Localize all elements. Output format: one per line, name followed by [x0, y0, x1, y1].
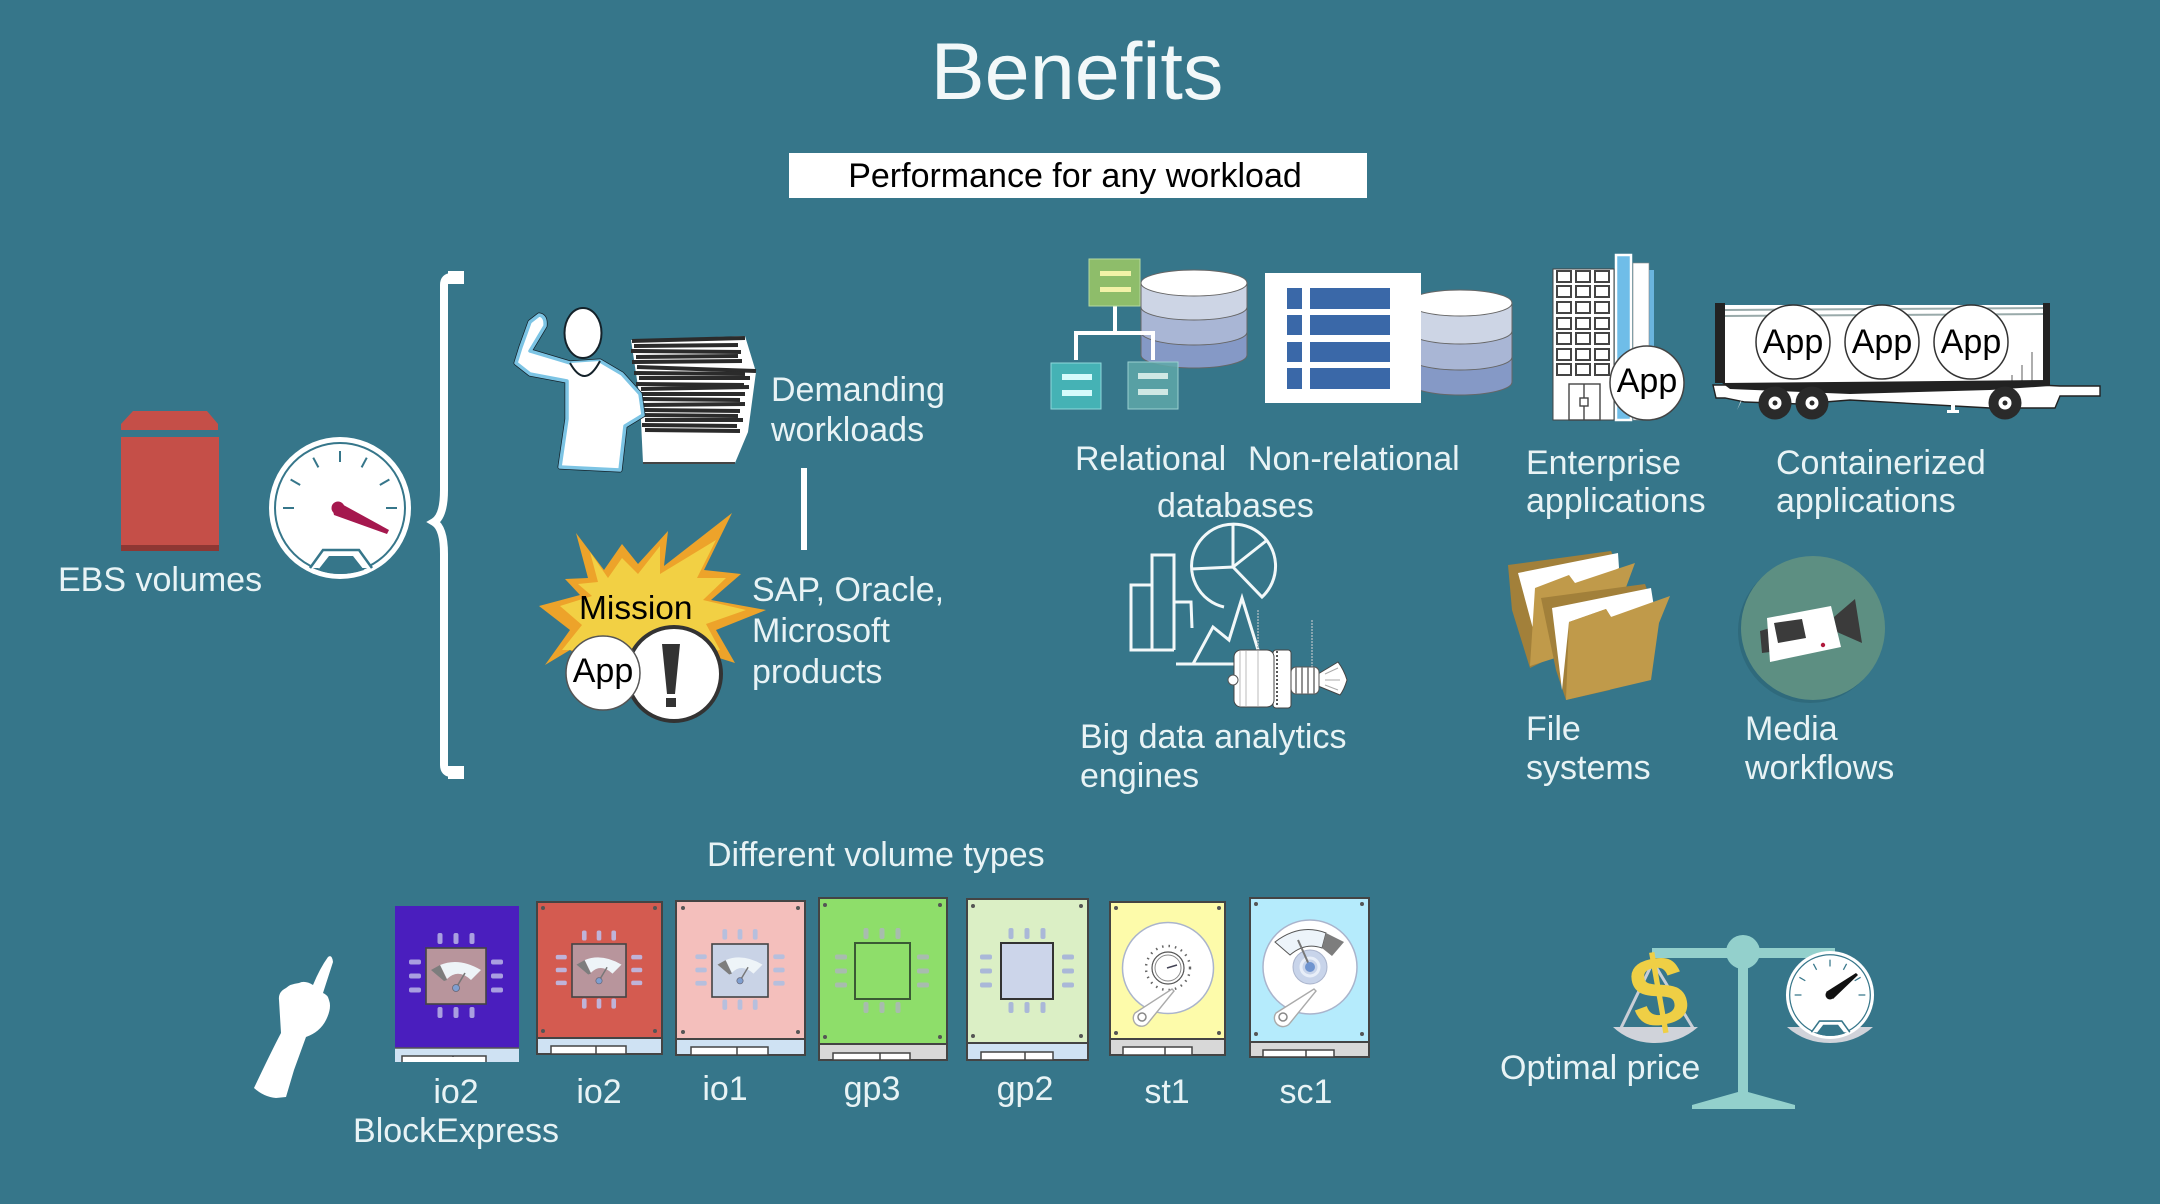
- title: Benefits: [931, 27, 1223, 117]
- label: Relational: Relational: [1075, 440, 1226, 478]
- app badges: App: [1763, 323, 1823, 361]
- labels: volume types: st1: [1144, 1073, 1190, 1111]
- label: Containerized applications: Containerized: [1776, 444, 1986, 482]
- icon: enterprise building with app: [1553, 255, 1684, 420]
- text: Mission: Mission: [579, 590, 693, 627]
- label: SAP, Oracle, Microsoft products: products: [752, 653, 882, 691]
- volume: gp3: [819, 898, 947, 1060]
- label: Media workflows: workflows: [1744, 749, 1894, 787]
- table node teal: [1051, 363, 1101, 409]
- icon: satellite engine: [1228, 610, 1347, 708]
- label: Big data analytics engines: engines: [1080, 757, 1199, 795]
- divider between workloads: [801, 468, 807, 550]
- labels: volume types: gp3: [844, 1070, 900, 1108]
- label: File systems: File: [1526, 710, 1581, 748]
- app badge: App: [573, 652, 633, 690]
- label: Enterprise applications: Enterprise: [1526, 444, 1681, 482]
- pie chart: [1191, 524, 1276, 607]
- heading: Different volume types: Different volume types: [707, 836, 1045, 874]
- icon: EBS volume: [121, 411, 219, 551]
- icon: balance scale: [1613, 932, 1874, 1109]
- person: [516, 308, 643, 470]
- label: Demanding workloads: Demanding: [771, 371, 945, 409]
- tree lines: [1076, 306, 1153, 360]
- area chart: [1176, 598, 1259, 664]
- labels: volume types: sc1: [1280, 1073, 1332, 1111]
- label: Demanding workloads: workloads: [770, 411, 924, 449]
- app badges: [1756, 305, 2008, 379]
- wheels: [1758, 386, 2022, 420]
- icon: relational database: [1051, 259, 1247, 409]
- icon: file folders: [1508, 551, 1670, 700]
- subtitle banner: Performance for any workload: [848, 157, 1302, 195]
- label: SAP, Oracle, Microsoft products: SAP, Oracle,: [752, 571, 944, 609]
- subtitle banner: [789, 153, 1367, 198]
- volume: gp2: [967, 899, 1088, 1060]
- icon: pointing hand: [254, 956, 333, 1098]
- labels: volume types: io1: [702, 1070, 748, 1108]
- volume: io2: [537, 902, 662, 1054]
- exclamation badge: [627, 627, 721, 721]
- icon: mission-critical app: [539, 513, 766, 721]
- icon: big data analytics: [1131, 524, 1276, 664]
- app badge: App: [1617, 362, 1677, 400]
- left pan with dollar: $: [1621, 932, 1696, 1052]
- app badge: [1610, 346, 1684, 420]
- label: Optimal price: Optimal price: [1500, 1049, 1700, 1087]
- icon: non-relational database: [1265, 273, 1512, 403]
- right pan with gauge: [1786, 951, 1874, 1043]
- label: Big data analytics engines: Big data analytics: [1080, 718, 1346, 756]
- app badge: [566, 636, 640, 710]
- icon: person with paper stack: [516, 308, 756, 470]
- label: Enterprise applications: applications: [1526, 482, 1706, 520]
- labels: volume types: [353, 1070, 1332, 1150]
- curly brace: [434, 271, 464, 779]
- volume: st1: [1110, 902, 1225, 1055]
- database cylinder: [1141, 270, 1247, 368]
- labels: volume types: gp2: [997, 1070, 1053, 1108]
- icon: media camera: [1738, 556, 1885, 703]
- label: Non-relational: Non-relational: [1248, 440, 1460, 478]
- trailer bed: [1713, 385, 2100, 408]
- labels: volume types: io2: [576, 1073, 622, 1111]
- label: Containerized applications: applications: [1776, 482, 1956, 520]
- label: EBS volumes: EBS volumes: [58, 561, 262, 599]
- scale stand: [1652, 935, 1835, 1109]
- label: Media workflows: Media: [1745, 710, 1838, 748]
- label: databases: databases: [1157, 487, 1314, 525]
- app badges: App: [1852, 323, 1912, 361]
- icon: container truck with apps: [1713, 303, 2100, 420]
- table node translucent: [1128, 362, 1178, 409]
- volume: io2 BlockExpress: [395, 906, 519, 1062]
- paper stack: [631, 336, 756, 463]
- volume: io1: [676, 901, 805, 1055]
- label: SAP, Oracle, Microsoft products: Microsoft: [752, 612, 890, 650]
- table node green: [1089, 259, 1140, 306]
- icon: performance gauge: [269, 437, 411, 579]
- labels: volume types: BlockExpress: [353, 1112, 559, 1150]
- volume: sc1: [1250, 898, 1369, 1057]
- label: File systems: systems: [1526, 749, 1651, 787]
- bar chart: [1131, 555, 1192, 650]
- labels: volume types: io2: [433, 1073, 479, 1111]
- app badges: App: [1941, 323, 2001, 361]
